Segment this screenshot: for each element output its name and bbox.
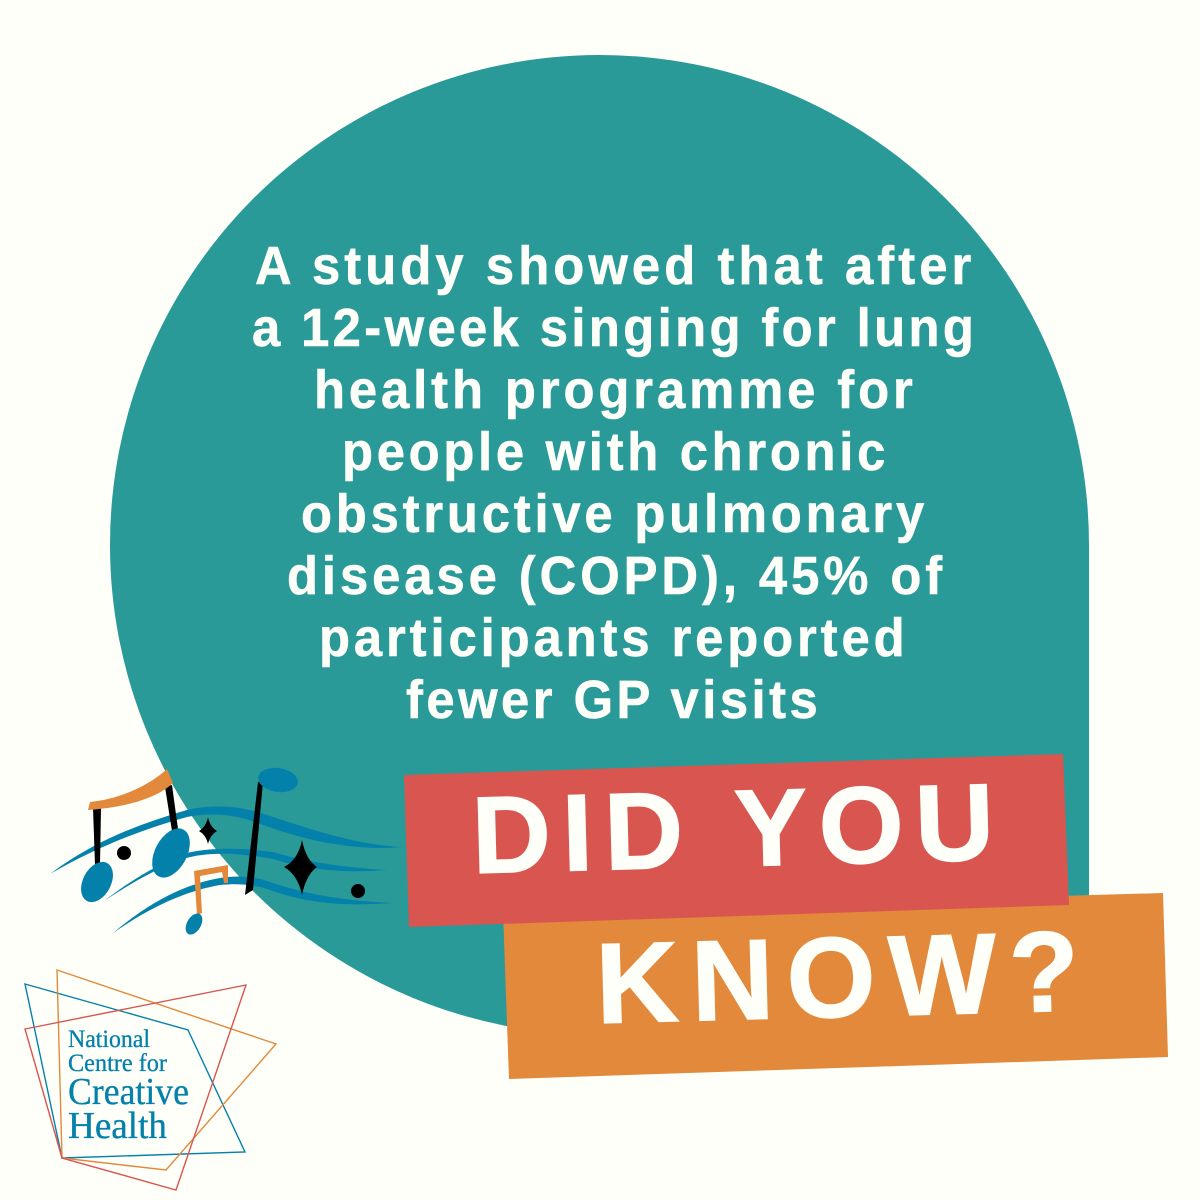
logo wordmark <box>68 1026 189 1147</box>
text block: study finding: obstructive pulmonary <box>301 485 924 544</box>
quarter note <box>245 782 263 895</box>
small orange note <box>194 865 228 915</box>
text block: study finding: a 12-week singing for lung <box>252 299 974 358</box>
panel: teal speech shape <box>110 55 1089 1035</box>
icon: music staff and notes <box>50 765 403 937</box>
logo wordmark: National <box>68 1026 150 1053</box>
text block: study finding: health programme for <box>314 361 913 420</box>
staff line 2 <box>104 849 387 901</box>
logo wordmark: Centre for <box>68 1050 168 1077</box>
text block: study finding: disease (COPD), 45% of <box>287 547 943 606</box>
text block: study finding <box>252 237 974 730</box>
staff line 1 <box>50 806 403 874</box>
sparkles and dots <box>199 817 317 895</box>
text block: study finding: people with chronic <box>342 423 885 482</box>
heading: know: KNOW? <box>594 908 1080 1048</box>
logo: National Centre for Creative Health <box>25 970 276 1190</box>
logo wordmark: Creative <box>68 1071 189 1113</box>
beamed note stems <box>93 785 178 865</box>
text block: study finding: A study showed that after <box>255 237 971 296</box>
note heads <box>75 856 119 908</box>
banner: orange <box>503 893 1168 1079</box>
orange beam <box>88 769 173 810</box>
heading: did you: DID YOU <box>470 761 995 897</box>
banner: red <box>404 754 1069 927</box>
staff line 3 <box>113 877 393 933</box>
text block: study finding: fewer GP visits <box>406 671 818 730</box>
logo outlines <box>25 970 276 1190</box>
text block: study finding: participants reported <box>319 609 905 668</box>
logo wordmark: Health <box>68 1105 167 1147</box>
